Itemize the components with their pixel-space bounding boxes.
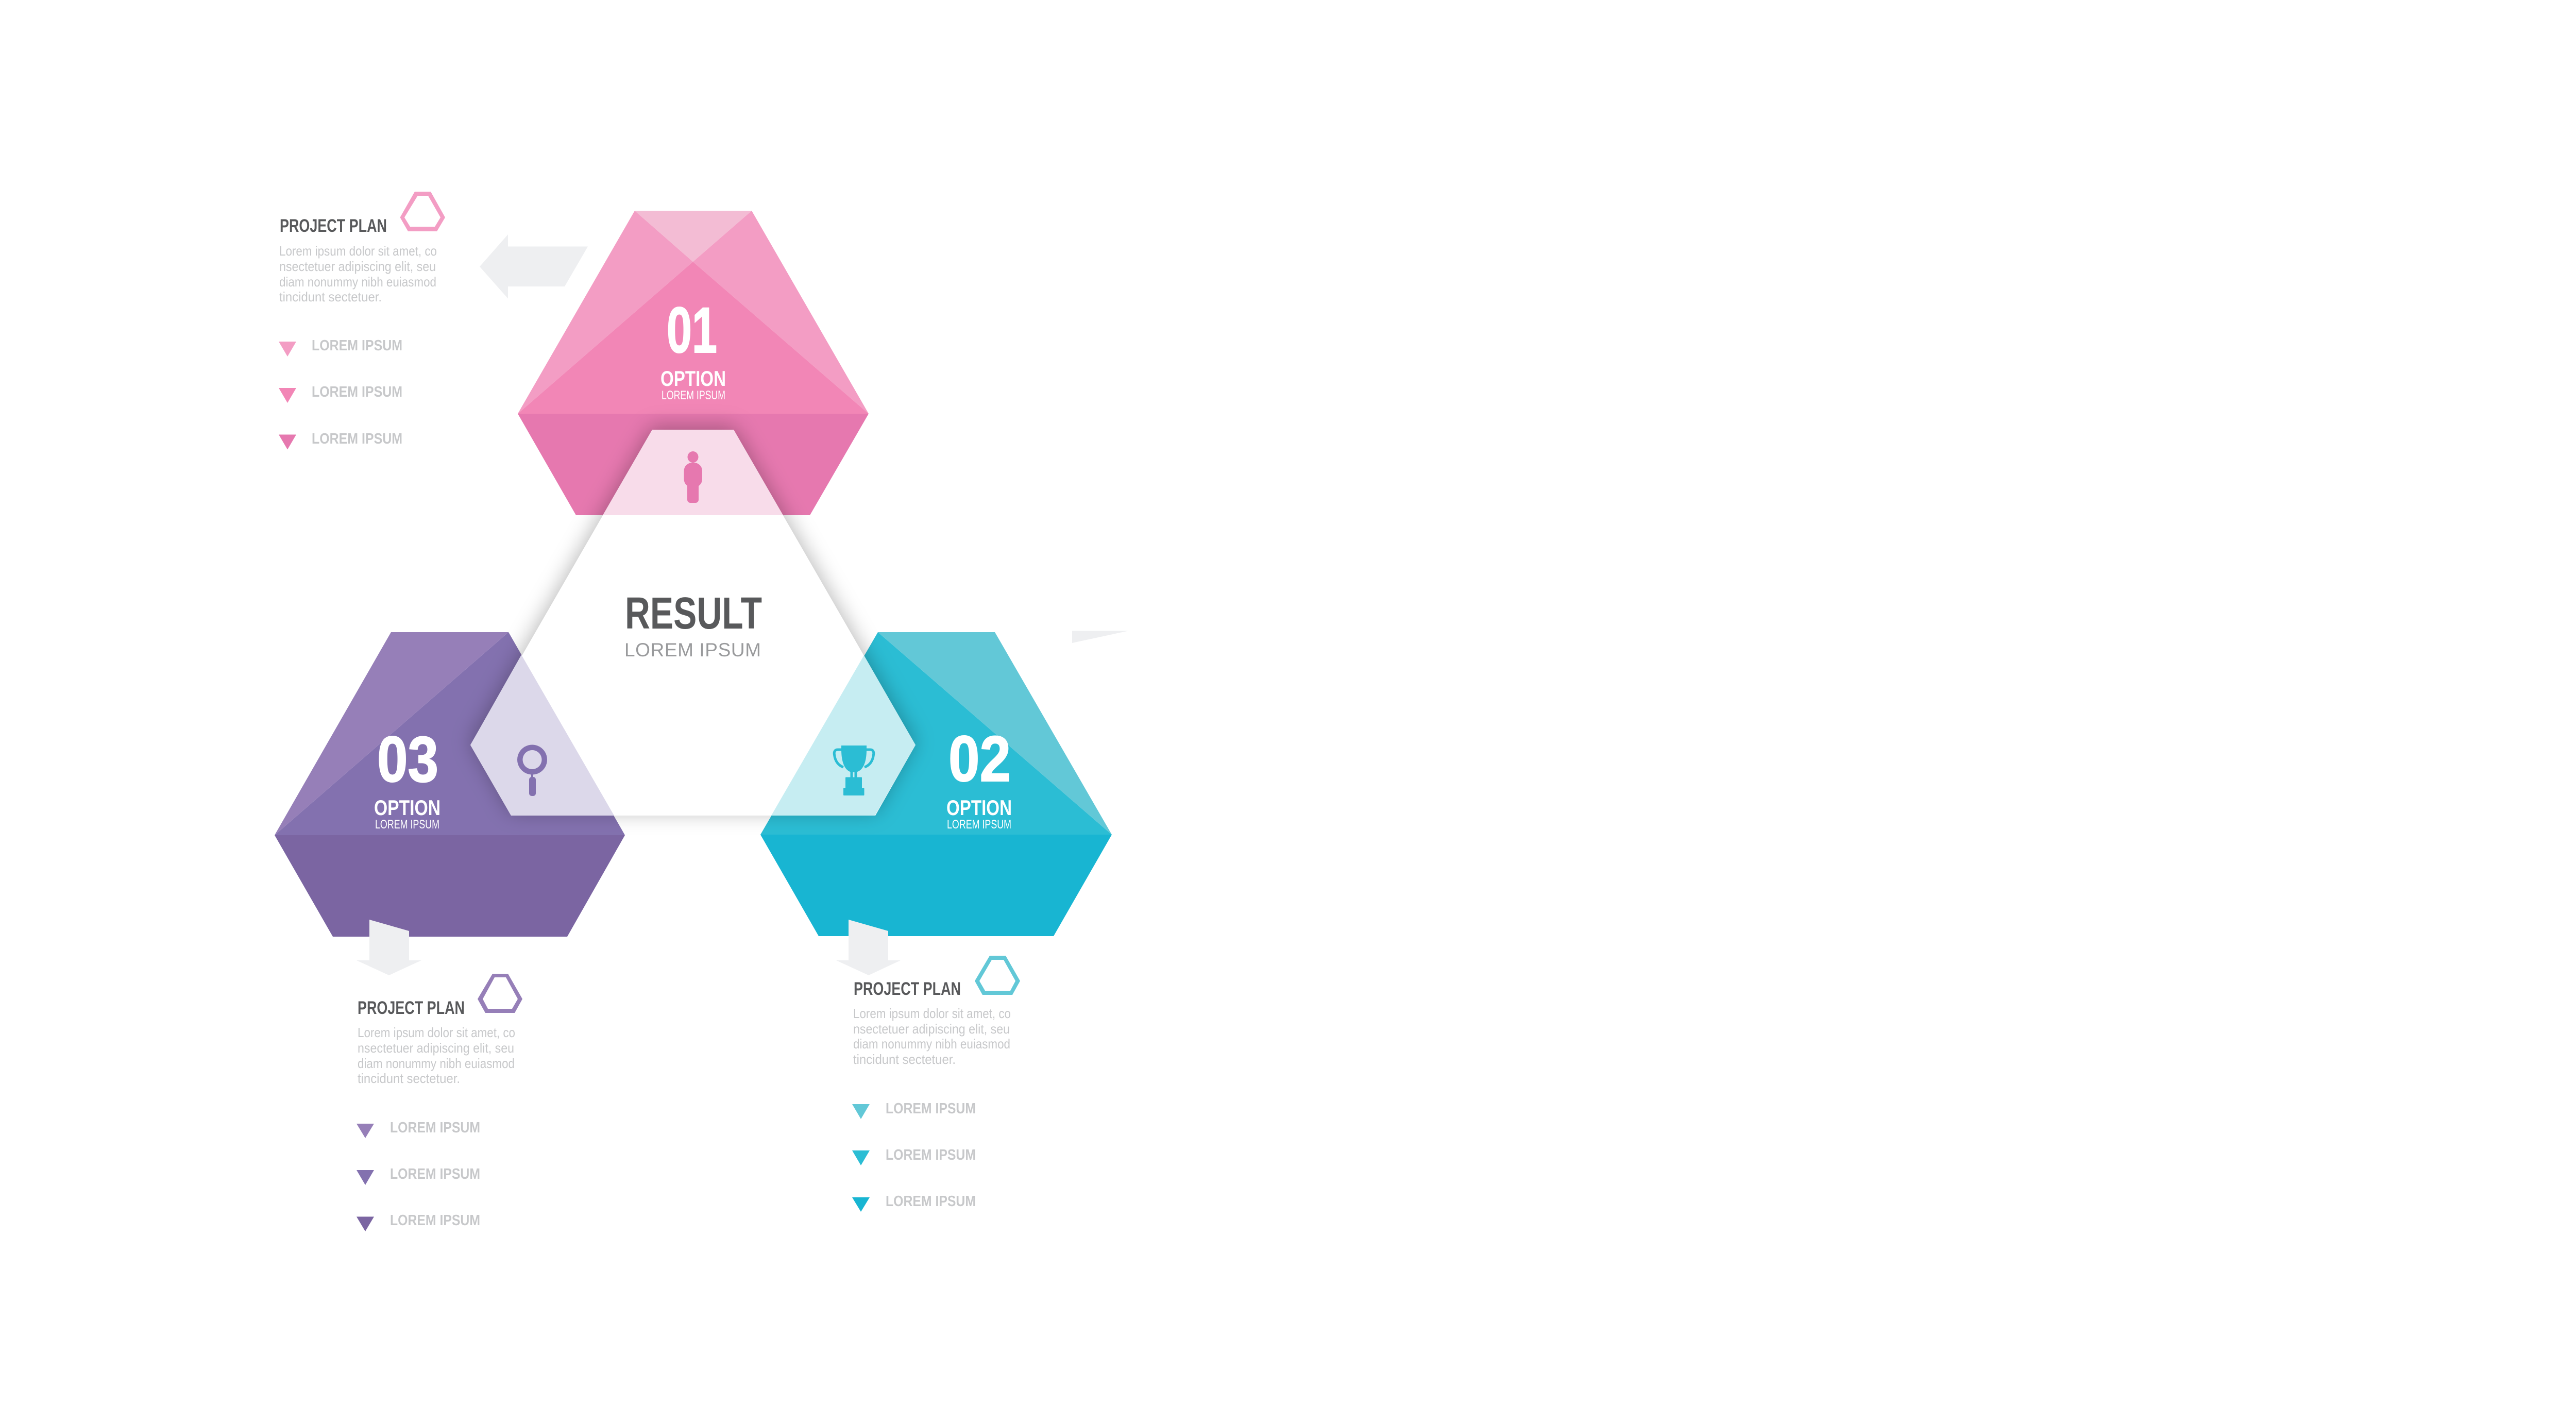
icon: hexagon outline [400,192,445,231]
list: bullets: LOREM IPSUM [390,1120,480,1136]
list: bullets: LOREM IPSUM [390,1212,480,1229]
icon: hexagon outline [478,974,522,1013]
list: bullets: LOREM IPSUM [886,1100,976,1117]
panel: project plan purple [357,974,522,1231]
label: option 01: 01 [667,295,717,366]
arrow: down from hexagon 02 [836,920,901,975]
text block: description: Lorem ipsum dolor sit amet, co [358,1025,515,1040]
text block: description: nsectetuer adipiscing elit, seu [279,259,436,274]
icon: person [684,451,702,503]
list: bullets: LOREM IPSUM [390,1166,480,1182]
label: option 02: LOREM IPSUM [947,818,1011,832]
text block: description: Lorem ipsum dolor sit amet, co [853,1006,1011,1021]
text block: description: tincidunt sectetuer. [853,1052,956,1067]
text block: description: nsectetuer adipiscing elit, seu [358,1040,514,1056]
label: option 01: LOREM IPSUM [662,388,725,402]
label: option 03: 03 [377,724,438,795]
label: option 01 [660,295,726,402]
panel: hexagon 03 purple [275,632,625,937]
list: bullets: LOREM IPSUM [312,431,402,447]
text block: description: nsectetuer adipiscing elit, seu [853,1021,1010,1037]
panel: hexagon 01 pink [518,211,869,515]
text block: description [358,1025,515,1086]
heading: project plan: PROJECT PLAN [280,216,387,236]
list: bullets: LOREM IPSUM [886,1147,976,1163]
label: option 03 [374,724,440,832]
list: bullets: LOREM IPSUM [312,384,402,400]
label: option 02: OPTION [946,795,1012,820]
text block: description [279,243,437,304]
panel: project plan teal [852,956,1020,1212]
center panel shadow [470,427,916,812]
panel: center result [470,430,916,816]
heading: result: RESULT [625,588,762,638]
heading: project plan: PROJECT PLAN [358,998,465,1018]
label: option 02: 02 [948,723,1011,795]
list: bullets [852,1100,976,1212]
text block: description: tincidunt sectetuer. [279,289,382,304]
label: option 03: OPTION [374,795,440,820]
panel: hexagon 02 teal [760,632,1112,936]
label: option 03: LOREM IPSUM [375,818,439,832]
text block: description: tincidunt sectetuer. [358,1071,460,1086]
text block: description: diam nonummy nibh euiasmod [358,1056,515,1071]
arrow: left from hexagon 01 [480,234,588,299]
icon: hexagon outline [975,956,1020,995]
text block: description: diam nonummy nibh euiasmod [279,274,436,290]
icon: magnifier [517,745,547,796]
text block: description: diam nonummy nibh euiasmod [853,1036,1010,1052]
list: bullets [279,337,402,449]
text block: description: Lorem ipsum dolor sit amet, co [279,243,437,259]
arrow fragment: stray sliver right of hexagon 02 [1072,631,1128,643]
list: bullets: LOREM IPSUM [312,337,402,354]
text: result subtitle: LOREM IPSUM [624,639,761,660]
label: option 01: OPTION [660,366,726,391]
panel: project plan pink [279,192,445,449]
text block: description [853,1006,1011,1067]
heading: project plan: PROJECT PLAN [854,979,961,999]
list: bullets: LOREM IPSUM [886,1193,976,1210]
arrow: down from hexagon 03 [357,920,421,975]
label: option 02 [946,723,1012,832]
icon: trophy [834,746,874,795]
list: bullets [357,1120,480,1231]
